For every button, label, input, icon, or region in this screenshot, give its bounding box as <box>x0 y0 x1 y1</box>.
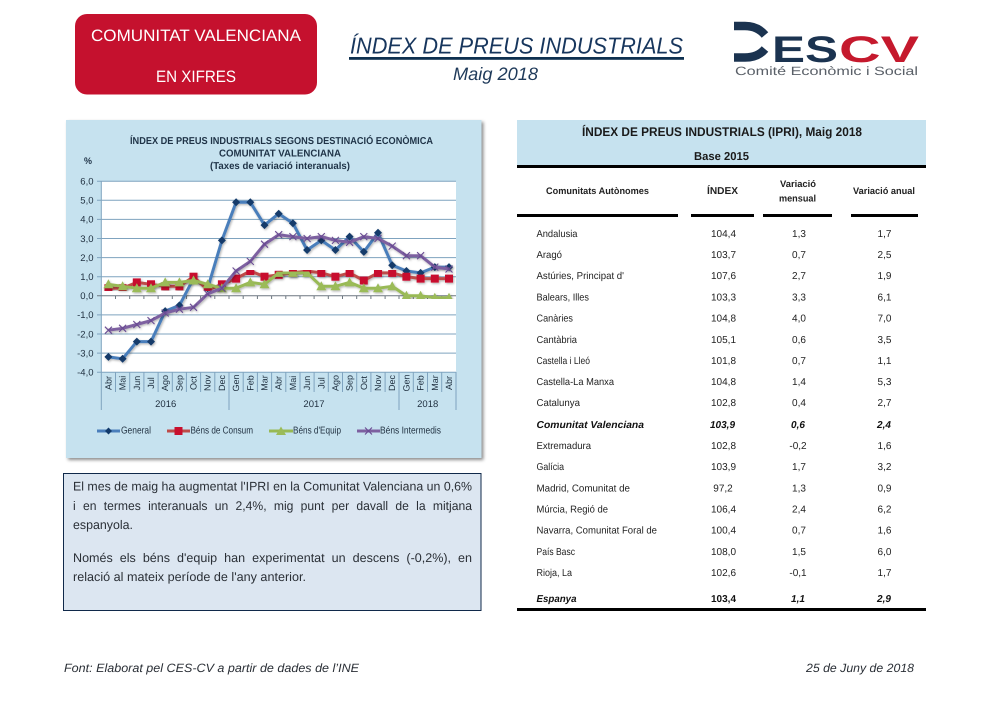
table rows: 1,1 <box>878 356 892 367</box>
month labels: Jul <box>316 377 326 389</box>
year labels: 2016 <box>155 399 176 410</box>
table header band <box>517 120 926 168</box>
panel: commentary text: espanyola. <box>73 518 133 532</box>
month labels: Jun <box>132 376 142 390</box>
table rows: Cantàbria <box>536 335 577 346</box>
table rows: 1,6 <box>878 441 892 452</box>
month labels: Oct <box>188 376 198 390</box>
month labels <box>103 374 454 392</box>
logo: CES-CV: CV <box>839 29 919 70</box>
table rows: 105,1 <box>711 335 736 346</box>
month labels: Mar <box>260 375 270 391</box>
month labels: Nov <box>373 375 383 391</box>
table rows: 7,0 <box>878 314 892 324</box>
y axis labels: 2,0 <box>80 253 94 264</box>
table rows: Madrid, Comunitat de <box>536 484 630 494</box>
table rows: 1,3 <box>792 484 806 494</box>
table rows: 5,3 <box>878 377 892 388</box>
year labels: 2018 <box>417 399 438 410</box>
series: Béns de Consum <box>108 271 449 290</box>
table rows: 2,4 <box>792 504 806 516</box>
table rows: Castella i Lleó <box>536 356 590 367</box>
table rows: Galícia <box>536 462 564 473</box>
table rows: 104,8 <box>711 314 736 324</box>
column headers: Variació anual <box>853 186 915 197</box>
y axis labels: 4,0 <box>80 215 94 226</box>
month labels: Jun <box>302 376 312 390</box>
legend: Béns de Consum <box>190 426 253 436</box>
chart title: (Taxes de variació interanuals) <box>210 161 350 172</box>
table rows: 0,7 <box>792 250 806 261</box>
y axis labels: -4,0 <box>77 368 94 379</box>
month labels: Jul <box>146 377 156 389</box>
month labels: Dec <box>217 375 227 391</box>
logo: CES-CV: Comité Econòmic i Social <box>735 64 918 78</box>
title <box>349 32 684 84</box>
panel: commentary text: Només els béns d'equip han experimentat un descens (-0,2%), en <box>73 551 472 565</box>
series: Béns d'Equip <box>108 273 449 298</box>
table rows: 1,3 <box>792 229 806 240</box>
badge: Comunitat Valenciana en xifres: EN XIFRES <box>156 68 236 86</box>
table rows: 3,3 <box>792 292 806 304</box>
year labels <box>155 399 438 410</box>
footer: source: Font: Elaborat pel CES-CV a partir de dades de l’INE <box>64 661 360 675</box>
table rows: Canàries <box>536 314 573 324</box>
month labels: Mai <box>118 376 128 390</box>
logo: CES-CV <box>734 26 919 78</box>
month labels: Dec <box>387 375 397 391</box>
legend: General <box>121 426 151 436</box>
table rows: -0,2 <box>789 441 807 452</box>
table rows: Castella-La Manxa <box>536 377 614 388</box>
panel: commentary text <box>64 474 481 610</box>
table rows: 104,4 <box>711 229 736 240</box>
panel: commentary text: i en termes interanuals un 2,4%, mig punt per davall de la mitjana <box>73 499 472 513</box>
table rows: 0,7 <box>792 526 806 536</box>
table rows: 0,4 <box>792 398 806 409</box>
table rows: 102,8 <box>711 398 736 409</box>
y axis labels: 0,0 <box>80 291 94 302</box>
table: IPRI per comunitats autònomes <box>517 120 926 611</box>
table rows: 3,2 <box>878 462 892 473</box>
column headers <box>517 179 918 217</box>
month labels: Ago <box>330 375 340 391</box>
month labels: Nov <box>203 375 213 391</box>
table rows: Aragó <box>536 250 562 261</box>
table rows: 103,4 <box>711 594 736 605</box>
month labels: Mai <box>288 376 298 390</box>
year labels: 2017 <box>303 399 325 410</box>
table rows: 100,4 <box>711 526 736 536</box>
legend <box>97 426 441 436</box>
table rows: 0,7 <box>792 356 806 367</box>
table rows: 1,7 <box>792 462 806 473</box>
table rows: País Basc <box>536 547 575 558</box>
column headers: Comunitats Autònomes <box>546 186 649 197</box>
column headers: Variació <box>780 179 816 190</box>
table rows: 1,7 <box>878 568 892 579</box>
table rows: 3,5 <box>878 335 892 346</box>
month labels: Abr <box>274 376 284 390</box>
y axis labels: 5,0 <box>80 196 94 206</box>
table rows: 6,1 <box>878 292 892 304</box>
y axis labels: 1,0 <box>80 272 94 283</box>
table rows: 101,8 <box>711 356 736 367</box>
table rows: Balears, Illes <box>536 292 589 304</box>
table rows: Catalunya <box>536 398 580 409</box>
table rows: 1,9 <box>878 271 892 282</box>
month labels: Abr <box>444 376 454 390</box>
title: Maig 2018 <box>453 64 538 84</box>
month labels: Feb <box>245 375 255 391</box>
footer: date: 25 de Juny de 2018 <box>805 661 914 675</box>
chart title: COMUNITAT VALENCIANA <box>219 148 341 160</box>
y axis labels: -1,0 <box>77 310 94 321</box>
table rows: 1,5 <box>792 547 806 558</box>
table rows: 1,6 <box>878 526 892 536</box>
column headers: mensual <box>779 194 816 204</box>
table rows: 6,0 <box>878 547 892 558</box>
chart title: % <box>84 156 93 167</box>
table rows: 0,6 <box>791 420 805 431</box>
table rows: 1,1 <box>791 594 805 605</box>
table rows: 6,2 <box>878 504 892 516</box>
table header band: ÍNDEX DE PREUS INDUSTRIALS (IPRI), Maig 2018 <box>582 124 862 139</box>
table rows: 108,0 <box>711 547 736 558</box>
table rows: Rioja, La <box>536 568 572 579</box>
month labels: Feb <box>416 375 426 391</box>
panel: commentary text: relació al mateix període de l'any anterior. <box>73 570 306 584</box>
panel: commentary text: El mes de maig ha augmentat l'IPRI en la Comunitat Valenciana un 0,6% <box>73 480 472 494</box>
month labels: Gen <box>401 374 411 392</box>
legend: Béns d'Equip <box>293 426 341 436</box>
month labels: Sep <box>174 375 184 391</box>
table rows: 0,9 <box>878 484 892 494</box>
table rows: 102,6 <box>711 568 736 579</box>
table rows: 1,4 <box>792 377 806 388</box>
y axis labels: -3,0 <box>77 348 94 359</box>
table rows: Comunitat Valenciana <box>536 420 644 431</box>
table rows: 106,4 <box>711 504 736 516</box>
table rows: 103,3 <box>711 292 736 304</box>
table rows: Navarra, Comunitat Foral de <box>536 526 657 536</box>
month labels: Abr <box>103 376 113 390</box>
y axis labels <box>77 176 94 379</box>
table rows: Extremadura <box>536 441 591 452</box>
table rows: 0,6 <box>792 335 806 346</box>
table rows: 2,7 <box>878 398 892 409</box>
month labels: Oct <box>359 376 369 390</box>
month labels: Mar <box>430 375 440 391</box>
title: ÍNDEX DE PREUS INDUSTRIALS <box>350 32 684 58</box>
badge: Comunitat Valenciana en xifres: COMUNITAT VALENCIANA <box>91 27 301 45</box>
table rows: 107,6 <box>711 271 736 282</box>
month labels: Sep <box>345 375 355 391</box>
logo: CES-CV: ES <box>772 29 838 70</box>
panel: line chart <box>66 120 482 458</box>
table rows: -0,1 <box>789 568 807 579</box>
y axis labels: 3,0 <box>80 234 94 245</box>
table rows: 4,0 <box>792 314 806 324</box>
y axis labels: 6,0 <box>80 176 94 188</box>
series: General <box>108 202 449 359</box>
badge: Comunitat Valenciana en xifres <box>75 14 317 94</box>
table header band: Base 2015 <box>694 151 750 163</box>
table rows: 2,4 <box>876 420 891 431</box>
month labels: Ago <box>160 375 170 391</box>
table rows: Andalusia <box>536 229 578 240</box>
plot area <box>101 181 456 372</box>
series: Béns Intermedis <box>108 235 449 330</box>
table rows: Astúries, Principat d' <box>536 271 624 282</box>
chart title <box>84 135 433 172</box>
chart title: ÍNDEX DE PREUS INDUSTRIALS SEGONS DESTINACIÓ ECONÒMICA <box>130 135 433 147</box>
table rows: Múrcia, Regió de <box>536 504 608 516</box>
table rows: 1,7 <box>878 229 892 240</box>
table rows <box>536 229 892 605</box>
table rows: 102,8 <box>711 441 736 452</box>
table rows: 2,5 <box>878 250 892 261</box>
table rows: 2,7 <box>792 271 806 282</box>
table rows: 103,9 <box>711 462 736 473</box>
table rows: 103,9 <box>710 420 735 431</box>
legend: Béns Intermedis <box>380 426 441 436</box>
y axis labels: -2,0 <box>77 329 94 340</box>
table rows: 103,7 <box>711 250 736 261</box>
table rows: Espanya <box>536 594 577 605</box>
table rows: 2,9 <box>876 594 891 605</box>
month labels: Gen <box>231 374 241 392</box>
table rows: 97,2 <box>713 484 733 494</box>
column headers: ÍNDEX <box>707 185 738 197</box>
table rows: 104,8 <box>711 377 736 388</box>
